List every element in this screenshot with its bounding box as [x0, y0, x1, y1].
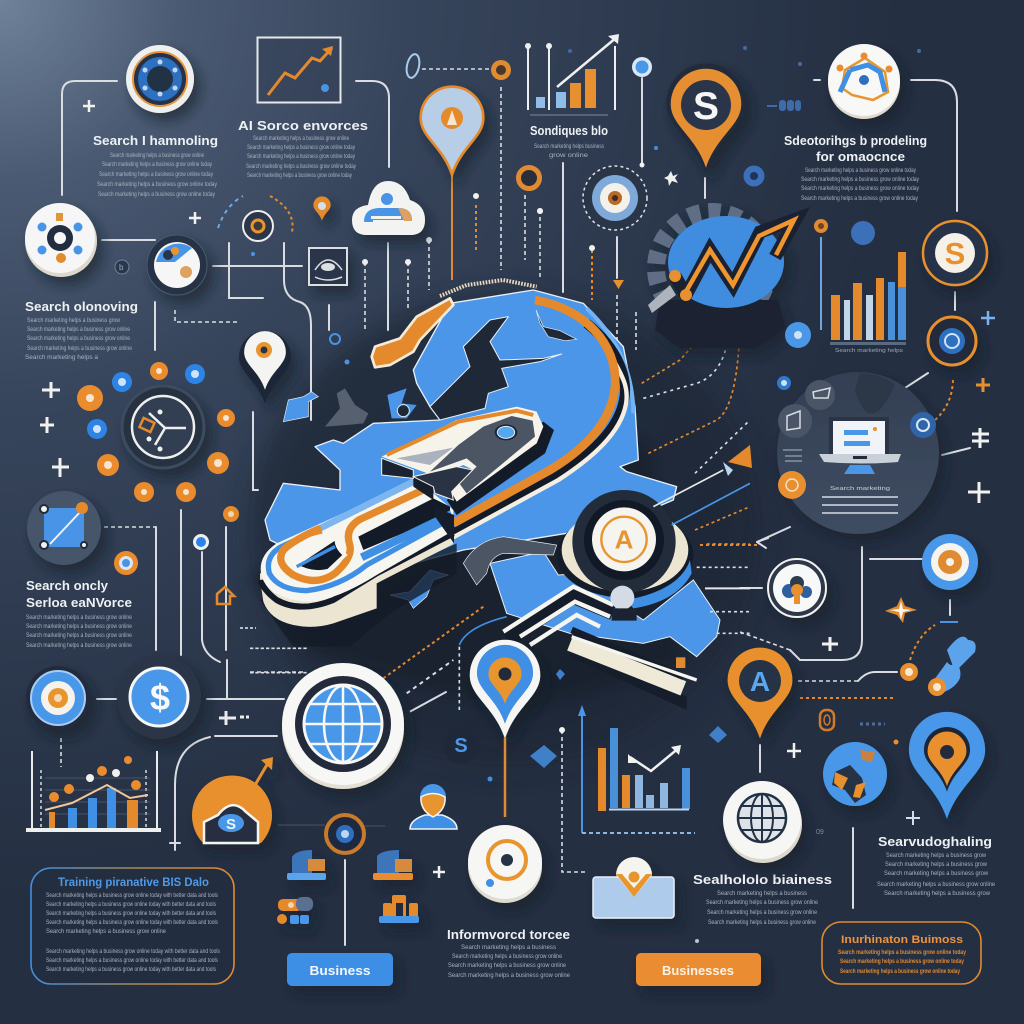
icon: brand disc bottom left [26, 666, 90, 730]
button: business blue [287, 953, 393, 986]
title block: search marketing: Search marketing helps a business grow online [110, 153, 204, 159]
text block: search oncly: Search marketing helps a business grow online [26, 633, 133, 639]
icon: ring marker top [405, 53, 511, 80]
chart: bottom left bars [26, 751, 161, 832]
track light blue stripe [320, 480, 417, 528]
title block: search marketing: Search marketing helps a business grow online today [99, 172, 213, 178]
dark map backdrop [250, 295, 760, 765]
track dark band [358, 498, 450, 550]
track inner blue line [297, 547, 335, 567]
text block: sdeotorihgs prodeling: Search marketing helps a business grow online today [801, 186, 919, 192]
icon: white target disc [468, 825, 542, 903]
text block: sondiques blo: Sondiques blo [530, 123, 608, 138]
text block: AI sorco envorces: Search marketing helps a business grow online [253, 136, 349, 142]
text block: sondiques blo [530, 123, 608, 159]
track orange end [311, 525, 323, 537]
text block: searvudoghaling [877, 834, 996, 897]
text block: sondiques blo: Search marketing helps business [534, 144, 604, 150]
shadow under map [250, 380, 683, 713]
europe landmass [265, 290, 677, 580]
icon: side sparkle crosses [822, 378, 990, 651]
icon: plus [433, 866, 445, 878]
ribbon dark edge [453, 323, 625, 533]
text block: search oncly: Search marketing helps a business grow online [26, 643, 133, 649]
text block: sealhololo biainess: Search marketing helps a business grow online [708, 920, 817, 926]
icon: landscape square [309, 248, 347, 285]
icon: down arrow [613, 280, 624, 289]
panel: training note: Search marketing helps a business grow online today with better data and tools [46, 967, 216, 973]
panel: training note: Search marketing helps a business grow online today with better data and tools [46, 949, 220, 955]
icon: blue pin [909, 712, 985, 819]
title block: search marketing: Search marketing helps a business grow online today [102, 162, 212, 168]
title block: search marketing: Search marketing helps a business grow online today [98, 192, 215, 198]
text block: AI sorco envorces: AI Sorco envorces [238, 118, 368, 133]
track top surface [261, 477, 453, 602]
panel: information business: Search marketing helps a business grow online today [840, 969, 961, 975]
connector lines [61, 69, 970, 945]
text block: search oncly: Serloa eaNVorce [26, 595, 132, 610]
medallion white [592, 507, 656, 571]
rocket porthole [495, 424, 517, 440]
infographic canvas: 09 [816, 829, 824, 836]
text block: search oncly: Search marketing helps a business grow online [26, 624, 133, 630]
icon: building group two [373, 850, 413, 880]
zigzag dark [675, 219, 796, 295]
norway fringe [440, 280, 537, 296]
paperclip track [260, 477, 457, 647]
icon: map pin blue orange [470, 640, 540, 739]
icon: orange ring blue center [928, 317, 976, 365]
center: europe map and rocket [250, 280, 750, 713]
icon: clock with orbit nodes [77, 362, 235, 502]
south connector lines [250, 607, 507, 713]
chart: top bars with arrow [525, 34, 619, 115]
icon: letter marker [330, 334, 350, 364]
ribbon cream edge [453, 360, 627, 537]
icon: ring target [243, 211, 273, 256]
medallion orange ring [601, 517, 647, 562]
track inner hole [295, 537, 345, 572]
medallion letter: A [615, 524, 634, 554]
stripe lower dark [572, 630, 683, 677]
text block: searvudoghaling: Search marketing helps a business grow online [877, 882, 996, 888]
text block: sealhololo biainess: Sealhololo biainess [693, 872, 832, 887]
icon: plus minus [219, 711, 249, 725]
text block: sdeotorihgs prodeling: Sdeotorihgs b prodeling [784, 133, 927, 148]
text block: searvudoghaling: Searvudoghaling [878, 834, 992, 849]
text block: AI sorco envorces: Search marketing helps a business grow online today [247, 145, 355, 151]
rocket silver fin [397, 448, 453, 465]
stripe white two [520, 602, 610, 637]
text block: searvudoghaling: Search marketing helps a business grow [884, 891, 991, 897]
icon: white network disc [828, 44, 900, 119]
icon: white hub disc [25, 203, 97, 277]
panel: information business [822, 922, 981, 984]
icon: note box pin [593, 857, 674, 918]
panel: training note: Training piranative BIS Dalo [58, 875, 209, 889]
title block: search marketing [93, 133, 218, 198]
icon: orange growth house [192, 757, 273, 843]
stripe shadow floor [570, 643, 687, 710]
text block: AI sorco envorces: Search marketing helps a business grow online today [247, 154, 355, 160]
text block: sondiques blo: grow online [549, 153, 589, 159]
stripe shadow [507, 595, 613, 638]
icon: blue pin ring [632, 57, 658, 168]
icon: orange growth house: S [226, 816, 236, 833]
panel: training note: Search marketing helps a business grow online today with better data and tools [46, 920, 218, 926]
icon: cloud user [352, 181, 425, 235]
icon: orange pin letter a [728, 648, 792, 738]
a medallion [557, 490, 693, 621]
medallion cream rim [562, 508, 688, 592]
stripe white one [503, 587, 613, 632]
icon: dollar disc [117, 655, 201, 739]
text block: searvudoghaling: Search marketing helps a business grow [886, 853, 987, 859]
icon: person [410, 784, 457, 829]
stripe base [570, 643, 683, 688]
rocket tail block [413, 477, 454, 543]
text block: sealhololo biainess: Search marketing helps a business grow online [707, 910, 818, 916]
icon: orange ring center bottom [278, 815, 385, 853]
icon: plus [83, 100, 95, 112]
finland coast patch [536, 310, 577, 341]
ribbon blue highlight [587, 308, 633, 413]
medallion blue rim [627, 560, 692, 608]
icon: building group three [277, 897, 313, 924]
icon: orange ring [518, 168, 543, 214]
icon: white pin [239, 331, 291, 404]
icon: small s coin: S [454, 735, 468, 757]
icon: blue target disc [922, 534, 978, 590]
icon: dollar disc: $ [150, 677, 170, 718]
icon: star and blue circle [664, 166, 764, 186]
dark c shape [463, 537, 557, 585]
icon: plus blue [981, 311, 995, 325]
norway orange coast [372, 298, 453, 367]
button: businesses orange [636, 953, 761, 986]
text block: search olonoving: Search marketing helps a business grow online [27, 346, 133, 352]
icon: pale pin [421, 87, 483, 175]
icon: growth chart frame [258, 38, 340, 102]
text block: informvorcd torcee: Search marketing helps a business grow online [452, 954, 563, 960]
icon: plus [787, 743, 801, 758]
text block: search olonoving [25, 299, 138, 361]
text block: informvorcd torcee: Search marketing helps a business [461, 945, 556, 951]
medallion dark disc [572, 490, 676, 593]
button: business blue: Business [310, 963, 370, 978]
chart: right bars [785, 219, 906, 354]
icon: square node disc [27, 491, 101, 565]
small island flag [283, 392, 318, 422]
text block: informvorcd torcee [447, 927, 571, 979]
icon: plus [189, 212, 201, 224]
icon: gear with growth zigzag [648, 212, 796, 348]
icon: small blue drop [777, 376, 791, 390]
southern europe [490, 552, 720, 657]
track cream base [260, 535, 453, 627]
ireland [387, 388, 417, 418]
icon: earth [823, 742, 887, 806]
icon: orange pin letter a: A [750, 666, 770, 697]
medallion ring [584, 500, 664, 580]
text block: sealhololo biainess: Search marketing helps a business [717, 891, 807, 897]
text block: sdeotorihgs prodeling [784, 133, 927, 202]
gear lower dark [655, 300, 785, 348]
title block: search marketing: Search marketing helps a business grow online today [97, 182, 217, 188]
track blue band [268, 517, 453, 591]
chart: center bars [578, 705, 690, 811]
panel: laptop circle [777, 372, 939, 534]
panel: training note: Search marketing helps a business grow online today with better data and tools [46, 958, 218, 964]
title block: search marketing: Search I hamnoling [93, 133, 218, 148]
decor: small blue pills [568, 46, 921, 111]
east connector lines [642, 320, 750, 633]
text block: sdeotorihgs prodeling: for omaocnce [816, 149, 905, 164]
icon: sparkle crosses [40, 382, 69, 477]
rocket body [430, 416, 535, 493]
icon: pie disc [147, 235, 207, 295]
icon: orange ring s: S [945, 236, 965, 271]
lower island [390, 570, 448, 608]
rocket dark fin [382, 458, 413, 478]
text block: search oncly: Search marketing helps a business grow online [26, 615, 133, 621]
stripe lower white [572, 637, 697, 680]
panel: training note: Search marketing helps a business grow online today with better data and tools [46, 902, 216, 908]
small orange tag [676, 657, 685, 668]
track blue stripe [362, 514, 452, 557]
panel: information business: Search marketing helps a business grow online today [838, 950, 967, 956]
text block: sdeotorihgs prodeling: Search marketing helps a business grow online today [801, 196, 918, 202]
rocket outline [382, 407, 543, 502]
icon: arrow chip east [723, 445, 752, 476]
medallion base [557, 512, 693, 598]
icon: top left medallion [126, 45, 194, 113]
panel: information business: Inurhinaton Buimoss [841, 934, 963, 946]
track drop shadow [260, 543, 457, 647]
icon: small s coin [443, 727, 492, 782]
icon: orange ring badge [114, 551, 138, 575]
icon: plus blue [906, 811, 920, 825]
panel: training note: Search marketing helps a business grow online today with better data and tools [46, 911, 216, 917]
orange connector [504, 737, 506, 817]
icon: blue coast blob [900, 637, 976, 696]
panel: training note [31, 868, 234, 984]
button: businesses orange: Businesses [662, 963, 734, 978]
panel: laptop circle: Search marketing [830, 486, 890, 492]
text block: informvorcd torcee: Search marketing helps a business grow online [448, 973, 571, 979]
text block: AI sorco envorces: Search marketing helps a business grow online today [247, 173, 352, 179]
ribbon orange band [453, 300, 615, 523]
medallion button [610, 586, 634, 610]
text block: informvorcd torcee: Informvorcd torcee [447, 927, 570, 942]
text block: search olonoving: Search marketing helps a [25, 355, 99, 361]
text block: search olonoving: Search marketing helps a business grow online [27, 336, 131, 342]
icon: building group one [287, 850, 326, 880]
text block: search olonoving: Search olonoving [25, 299, 138, 314]
panel: training note: Search marketing helps a business grow online [46, 929, 167, 935]
rocket [382, 407, 554, 543]
text block: AI sorco envorces [238, 118, 368, 179]
icon: small dark circle: b [119, 263, 124, 272]
text block: searvudoghaling: Search marketing helps a business grow [885, 862, 988, 868]
panel: training note: Search marketing helps a business grow online today with better data and tools [46, 893, 218, 899]
icon: dashed eye [583, 166, 647, 230]
gear blue disc [668, 216, 784, 308]
track dark stripe [261, 533, 453, 607]
icon: pin letter s: S [693, 85, 719, 128]
zigzag orange [684, 220, 794, 295]
rocket lower fin [413, 467, 473, 500]
icon: orange ring s [923, 221, 987, 285]
chevron stripes [503, 587, 697, 710]
text block: informvorcd torcee: Search marketing helps a business grow online [448, 963, 567, 969]
icon: building group four [379, 895, 419, 923]
text block: search olonoving: Search marketing helps a business grow [27, 318, 121, 324]
gear teeth [656, 212, 768, 324]
uk grey [325, 388, 368, 427]
icon: orange star [885, 597, 917, 623]
icon: small orange pin [313, 196, 331, 221]
icon: globe ring [282, 663, 404, 789]
icon: pin letter s [666, 63, 746, 175]
tiny badge [397, 405, 409, 417]
text block: search olonoving: Search marketing helps a business grow online [27, 327, 131, 333]
text block: sdeotorihgs prodeling: Search marketing helps a business grow online today [801, 177, 919, 183]
text block: sealhololo biainess [693, 872, 832, 926]
medallion clasp [612, 608, 637, 621]
icon: small dark circle [115, 260, 129, 274]
chart: right bars: Search marketing helps [835, 348, 904, 354]
icon: white puzzle circle [768, 559, 826, 617]
icon: white globe [723, 781, 802, 863]
track orange loop [281, 488, 427, 580]
text block: sdeotorihgs prodeling: Search marketing helps a business grow online today [805, 168, 916, 174]
icon: small coin nodes [193, 506, 256, 628]
icon: orange o mark [820, 710, 898, 744]
text block: search oncly: Search oncly [26, 578, 109, 593]
text block: AI sorco envorces: Search marketing helps a business grow online today [246, 164, 356, 170]
text block: sealhololo biainess: Search marketing helps a business grow online [706, 900, 819, 906]
rocket orange outline [387, 411, 533, 455]
text block: search oncly [26, 578, 133, 649]
icon: blue diamonds [530, 669, 727, 768]
text block: searvudoghaling: Search marketing helps a business grow [884, 871, 989, 877]
rocket shadow [447, 422, 554, 515]
panel: information business: Search marketing helps a business grow online today [840, 959, 965, 965]
baltic sea [430, 317, 562, 420]
stripe white three [530, 615, 600, 645]
